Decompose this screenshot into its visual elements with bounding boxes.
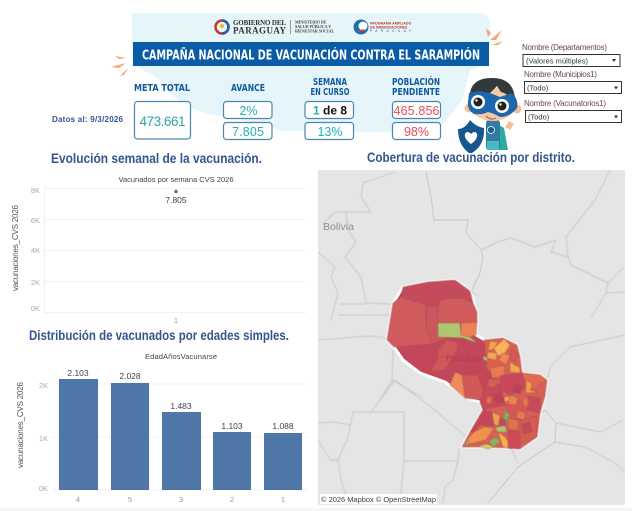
bars [59,379,302,490]
map: Bolivia label: Bolivia [323,221,354,233]
filter: municipios [524,70,622,94]
bar category labels: 2 [230,495,234,504]
KPI: semana en curso: 1 de 8 [313,104,347,118]
filter: vacunatorios [524,99,622,122]
logo: Programa Ampliado de Inmunizaciones: DE INMUNIZACIONES [370,26,408,30]
logo: Gobierno del Paraguay: SALUD PÚBLICA Y [295,24,331,29]
bar chart: vacunados por edad: EdadAñosVacunarse [145,352,217,361]
bar category labels [76,495,285,504]
KPI heading: meta total: META TOTAL [134,83,190,94]
map: Paraguay districts [387,280,547,449]
logo: Gobierno del Paraguay: MINISTERIO DE [295,20,327,24]
line chart: vacunados por semana: Vacunados por semana CVS 2026 [118,175,234,184]
KPI: meta total value: 473.661 [140,114,186,129]
KPI heading: avance: AVANCE [231,83,265,94]
mascot: masked hero child with shield [458,78,522,153]
KPI heading: poblacion pendiente: POBLACIÓN [392,76,440,88]
bar value labels: 1.483 [170,401,192,411]
map: attribution: © 2026 Mapbox © OpenStreetMap [321,495,436,504]
filter: departamentos [522,43,620,66]
bar value labels: 1.103 [221,421,243,431]
KPI: meta total value [134,102,190,139]
campaign banner: CAMPAÑA NACIONAL DE VACUNACIÓN CONTRA EL SARAMPIÓN [142,48,480,64]
filter: departamentos: (Valores múltiples) [526,56,588,66]
filter: municipios: (Todo) [527,84,549,92]
filter: municipios: Nombre (Municipios1) [524,70,597,79]
bar chart: vacunados por edad: 2K [39,381,48,390]
bar value labels [67,368,294,431]
bar value labels: 2.028 [119,371,141,381]
filter: vacunatorios: (Todo) [528,112,550,122]
KPI heading: semana en curso: EN CURSO [310,87,350,98]
bar category labels: 4 [76,495,80,504]
filter: departamentos: Nombre (Departamentos) [522,43,607,52]
KPI: avance value [224,122,272,140]
map: neighbouring country borders [318,170,625,503]
line chart: vacunados por semana: 7.805 [165,195,187,205]
data date: Datos al: 9/3/2026 [52,115,124,124]
line chart: vacunados por semana: 1 [174,316,178,325]
KPI: poblacion pendiente percent: 98% [404,125,429,139]
KPI: semana percent: 13% [317,125,343,139]
campaign banner [133,42,489,66]
filter: vacunatorios: Nombre (Vacunatorios1) [524,99,606,108]
line chart: vacunados por semana: 4K [31,246,40,255]
heading: evolucion semanal: Evolución semanal de la vacunación. [51,150,262,166]
logo: Gobierno del Paraguay [216,19,334,36]
map: Paraguay label: Paraguay [446,353,483,363]
bar category labels: 1 [281,495,285,504]
KPI heading: poblacion pendiente: PENDIENTE [392,87,440,98]
bar category labels: 5 [128,495,132,504]
line chart: vacunados por semana: 6K [31,216,40,225]
line chart: vacunados por semana: 0K [31,304,40,313]
logo: Programa Ampliado de Inmunizaciones: PROGRAMA AMPLIADO [370,22,411,26]
bar value labels: 2.103 [67,368,89,378]
KPI heading: semana en curso [310,77,350,98]
bar chart: vacunados por edad: 1K [39,434,48,443]
bottom edge band [0,508,632,511]
bar chart: vacunados por edad [16,352,308,504]
KPI heading: semana en curso: SEMANA [313,77,347,88]
KPI: semana percent [305,122,354,140]
line chart: vacunados por semana: 8K [31,186,40,195]
bar chart: vacunados por edad: vacunaciones_CVS 2026 [16,381,25,468]
line chart: vacunados por semana: 2K [31,278,40,287]
logo: Gobierno del Paraguay: PARAGUAY [233,26,286,36]
KPI: poblacion pendiente percent [392,122,440,140]
KPI: poblacion pendiente value: 465.856 [394,104,440,118]
KPI: semana en curso [305,102,354,118]
header background blob [132,13,490,132]
KPI: avance percent [224,102,272,118]
sparks right [486,28,503,45]
map: Paraguay silhouette with white halo [387,280,547,449]
logo: Programa Ampliado de Inmunizaciones [354,20,412,34]
bar chart: vacunados por edad: 0K [39,484,48,493]
heading: cobertura por distrito: Cobertura de vacunación por distrito. [367,149,575,165]
line chart: vacunados por semana [11,175,306,325]
logo: Gobierno del Paraguay: GOBIERNO DEL [233,19,286,27]
KPI: avance percent: 2% [239,104,258,118]
sparks left [111,56,128,76]
bar category labels: 3 [179,495,183,504]
bar value labels: 1.088 [272,421,294,431]
heading: distribucion por edades: Distribución de vacunados por edades simples. [29,327,289,343]
KPI heading: poblacion pendiente [392,76,440,98]
logo: Programa Ampliado de Inmunizaciones: PARAGUAY [370,29,412,33]
KPI: avance value: 7.805 [232,125,264,139]
logo: Gobierno del Paraguay: BIENESTAR SOCIAL [295,28,334,34]
line chart: vacunados por semana: vacunaciones_CVS 2026 [11,204,20,291]
map: coverage by district [318,170,625,505]
